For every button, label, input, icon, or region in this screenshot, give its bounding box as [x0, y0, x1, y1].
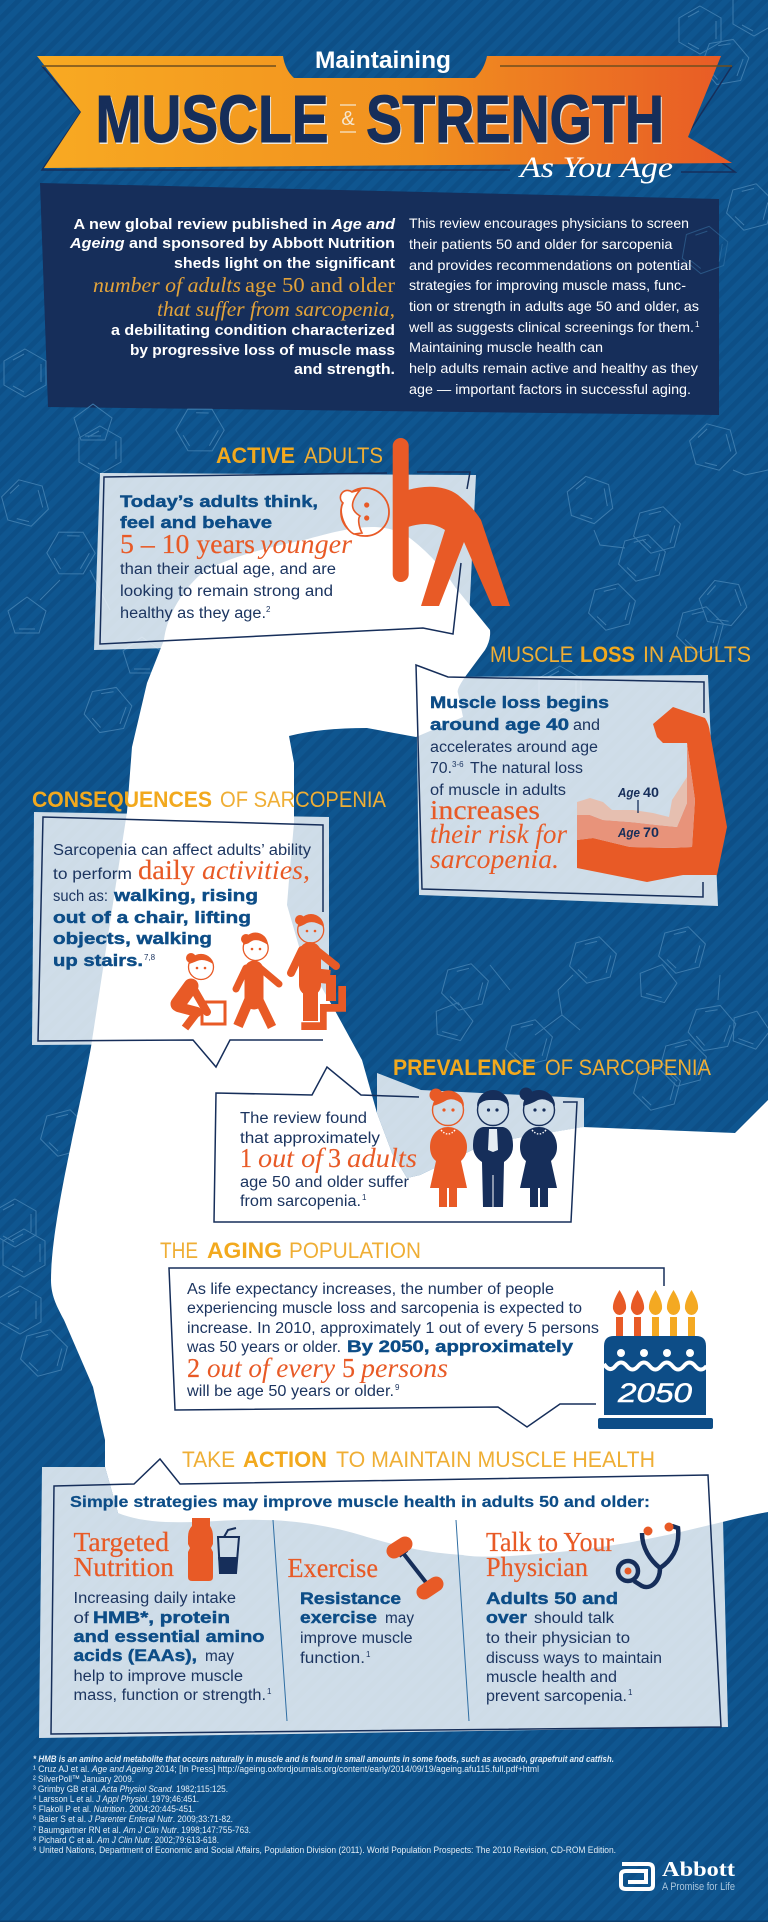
muscle loss text: 70. [430, 760, 452, 777]
icon: nutrition bottle and cup [188, 1518, 239, 1581]
consequences text: walking, rising [113, 886, 258, 905]
intro left text: by progressive loss of muscle mass [130, 343, 395, 359]
consequences text: 7,8 [144, 953, 156, 962]
aging population text: was 50 years or older. [186, 1339, 341, 1356]
active adults text: looking to remain strong and [120, 583, 333, 600]
column: talk to your physician: muscle health and [486, 1669, 617, 1686]
intro right text: and provides recommendations on potential [409, 258, 692, 273]
column: targeted nutrition: acids (EAAs), [74, 1646, 197, 1665]
column: targeted nutrition: Targeted [74, 1527, 169, 1557]
consequences text: such as: [53, 888, 108, 905]
consequences text: objects, walking [53, 929, 212, 948]
heading: muscle loss [490, 642, 751, 667]
intro right text: This review encourages physicians to screen [409, 216, 689, 231]
intro left text: Ageing and sponsored by Abbott Nutrition [69, 236, 395, 252]
icon: stethoscope [618, 1522, 678, 1587]
intro left text: sheds light on the significant [174, 256, 395, 272]
footnotes: ⁹ United Nations, Department of Economic and Social Affairs, Population Division (2011). World Population Prospects: The 2010 Revision, CD-ROM Edition. [33, 1845, 616, 1856]
footnotes: * HMB is an amino acid metabolite that occurs naturally in muscle and is found in small amounts in some foods, such as avocado, grapefruit and catfish. [33, 1754, 614, 1765]
heading: consequences: CONSEQUENCES [32, 787, 212, 812]
person lifting box [178, 953, 225, 1028]
icon: birthday cake 2050: 2050 [617, 1378, 692, 1408]
heading: prevalence: OF SARCOPENIA [545, 1055, 711, 1080]
take action intro line: Simple strategies may improve muscle health in adults 50 and older: [70, 1494, 650, 1511]
column: talk to your physician: 1 [628, 1688, 633, 1697]
aging population text: 5 [342, 1353, 355, 1383]
heading: consequences: OF SARCOPENIA [220, 787, 386, 812]
column: exercise: improve muscle [300, 1630, 412, 1647]
heading: prevalence [393, 1055, 711, 1080]
intro left text: age 50 and older [245, 273, 395, 297]
banner heading: Muscle: MUSCLE [96, 84, 330, 158]
intro right text: tion or strength in adults age 50 and older, as [409, 299, 699, 314]
icon: stretching adult [340, 438, 510, 606]
heading: aging population: POPULATION [289, 1238, 421, 1263]
aging population text: will be age 50 years or older. [186, 1383, 394, 1400]
icon: three adults [430, 1088, 557, 1207]
banner ribbon shadow [42, 66, 735, 172]
icon: people doing daily activities [178, 914, 346, 1030]
muscle loss text: their risk for [430, 819, 567, 849]
column: targeted nutrition: HMB*, protein [93, 1608, 230, 1627]
active adults text: than their actual age, and are [120, 561, 336, 578]
consequences text: activities, [202, 855, 310, 885]
heading: consequences [32, 787, 386, 812]
footnotes: ⁵ Flakoll P et al. Nutrition. 2004;20:445-451. [33, 1804, 195, 1815]
consequences text: up stairs. [53, 951, 143, 970]
column: talk to your physician: Talk to Your [486, 1527, 614, 1557]
column: exercise: exercise [300, 1608, 377, 1627]
prevalence text: out of [258, 1143, 327, 1173]
heading: take action: TAKE [182, 1447, 235, 1472]
prevalence text: adults [347, 1143, 417, 1173]
column: targeted nutrition: Increasing daily intake [74, 1590, 236, 1607]
footnotes: ⁶ Baier S et al. J Parenter Enteral Nutr. 2009;33:71-82. [33, 1814, 233, 1825]
prevalence text [240, 1110, 417, 1210]
heading: muscle loss: MUSCLE [490, 642, 573, 667]
consequences text [53, 842, 311, 970]
column: talk to your physician: Adults 50 and [486, 1589, 618, 1608]
aging population text: increase. In 2010, approximately 1 out of every 5 persons [187, 1320, 599, 1337]
white arm and body silhouette [51, 527, 768, 1557]
aging population text: experiencing muscle loss and sarcopenia is expected to [187, 1300, 582, 1317]
icon: birthday cake 2050 [598, 1290, 713, 1429]
aging population text [186, 1281, 599, 1400]
active adults text: 2 [266, 605, 271, 614]
muscle loss text: sarcopenia. [430, 844, 559, 874]
footnotes: ³ Grimby GB et al. Acta Physiol Scand. 1982;115:125. [33, 1784, 228, 1795]
heading: muscle loss: IN ADULTS [643, 642, 751, 667]
icon: flexed arm with muscle loss layers: Age [617, 785, 640, 800]
column: targeted nutrition: and essential amino [74, 1627, 264, 1646]
muscle loss text: 3-6 [452, 760, 464, 769]
intro panel background [40, 183, 719, 415]
column: exercise: Exercise [288, 1553, 378, 1583]
heading: prevalence: PREVALENCE [393, 1055, 536, 1080]
column: exercise [288, 1544, 436, 1667]
intro left text: a debilitating condition characterized [111, 323, 395, 339]
Abbott logo [621, 1857, 735, 1893]
heading: aging population: AGING [207, 1238, 282, 1263]
consequences text: out of a chair, lifting [53, 908, 251, 927]
column: exercise: Resistance [300, 1589, 401, 1608]
intro right text: Maintaining muscle health can [409, 340, 603, 355]
active adults text [120, 492, 353, 622]
muscle loss text: Muscle loss begins [430, 693, 609, 712]
column: talk to your physician: to their physician to [486, 1630, 630, 1647]
banner heading: Strength: STRENGTH [366, 82, 664, 157]
active adults text: feel and behave [120, 513, 272, 532]
molecule pattern [0, 0, 768, 1382]
panel: consequences [32, 812, 346, 1067]
title banner [37, 47, 735, 184]
icon: flexed arm with muscle loss layers: 70 [643, 824, 659, 840]
active adults text: younger [257, 529, 353, 559]
icon: flexed arm with muscle loss layers: Age [617, 825, 640, 840]
column: targeted nutrition: Nutrition [74, 1552, 175, 1582]
footnotes: ⁷ Baumgartner RN et al. Am J Clin Nutr. 1998;147:755-763. [33, 1825, 251, 1836]
banner heading: Muscle: MUSCLE [96, 82, 328, 157]
active adults text: 5 – 10 years [120, 529, 255, 559]
column: targeted nutrition: help to improve muscle [74, 1668, 243, 1685]
woman in orange [430, 1088, 467, 1207]
intro right text: 1 [695, 320, 700, 329]
heading: aging population: THE [160, 1238, 198, 1263]
intro right text: age — important factors in successful aging. [409, 382, 691, 397]
intro right text: well as suggests clinical screenings for them. [408, 320, 694, 335]
person walking [236, 932, 279, 1027]
column: talk to your physician: prevent sarcopenia. [486, 1688, 627, 1705]
heading: active adults [216, 443, 383, 468]
icon: flexed arm with muscle loss layers: 40 [643, 784, 659, 800]
footnotes [33, 1754, 616, 1856]
heading: active adults: ADULTS [304, 443, 383, 468]
heading: muscle loss: LOSS [580, 642, 635, 667]
heading: active adults: ACTIVE [216, 443, 295, 468]
prevalence text: The review found [240, 1110, 367, 1127]
aging population text: persons [359, 1353, 448, 1383]
intro right text: strategies for improving muscle mass, func- [409, 278, 686, 293]
intro right text: their patients 50 and older for sarcopenia [409, 237, 673, 252]
aging population text: 2 [187, 1353, 200, 1383]
muscle loss text: and [573, 717, 600, 734]
footnotes: ⁴ Larsson L et al. J Appl Physiol. 1979;46:451. [33, 1794, 199, 1805]
column: talk to your physician: Physician [486, 1552, 588, 1582]
muscle loss text: accelerates around age [430, 739, 598, 756]
prevalence text: 1 [240, 1143, 252, 1173]
prevalence text: that approximately [240, 1130, 380, 1147]
column: exercise: may [385, 1610, 414, 1627]
column: targeted nutrition: of [74, 1610, 90, 1627]
banner ribbon [37, 56, 732, 168]
muscle loss text: increases [430, 795, 540, 825]
column: targeted nutrition: 1 [267, 1687, 272, 1696]
muscle loss text: The natural loss [470, 760, 583, 777]
heading: take action: TO MAINTAIN MUSCLE HEALTH [336, 1447, 655, 1472]
icon: dumbbell [394, 1544, 436, 1592]
muscle loss text [430, 693, 609, 874]
column: exercise: 1 [366, 1650, 371, 1659]
muscle loss text: of muscle in adults [430, 782, 566, 799]
column: talk to your physician: over [486, 1608, 527, 1627]
footnotes: ⁸ Pichard C et al. Am J Clin Nutr. 2002;79:613-618. [33, 1835, 219, 1846]
column: talk to your physician: discuss ways to maintain [486, 1650, 662, 1667]
intro right text: help adults remain active and healthy as they [409, 361, 698, 376]
footnotes: ¹ Cruz AJ et al. Age and Ageing 2014; [In Press] http://ageing.oxfordjournals.org/content/early/2014/09/19/ageing.afu115.full.pdf+html [33, 1764, 539, 1775]
prevalence text: 3 [328, 1143, 341, 1173]
aging population text: As life expectancy increases, the number of people [187, 1281, 554, 1298]
active adults text: healthy as they age. [120, 605, 266, 622]
footnotes: ² SilverPoll™ January 2009. [33, 1774, 134, 1785]
Abbott logo: A Promise for Life [662, 1881, 735, 1893]
column: targeted nutrition [74, 1518, 272, 1704]
column: exercise: function. [300, 1650, 365, 1667]
ampersand [340, 105, 356, 132]
heading: aging population [160, 1238, 421, 1263]
panel: take action [39, 1459, 728, 1738]
heading: take action [182, 1447, 655, 1472]
panel: muscle loss [416, 665, 727, 906]
column: targeted nutrition: may [205, 1648, 234, 1665]
man in navy suit [473, 1090, 513, 1207]
prevalence text: from sarcopenia. [240, 1193, 361, 1210]
intro left text [69, 217, 396, 378]
aging population text: By 2050, approximately [347, 1337, 574, 1356]
panel: aging population [169, 1268, 713, 1429]
intro right text [408, 216, 700, 397]
intro left text: and strength. [294, 362, 395, 378]
aging population text: 9 [395, 1383, 400, 1392]
icon: flexed arm with muscle loss layers [577, 707, 727, 882]
active adults text: Today’s adults think, [120, 492, 318, 511]
consequences text: to perform [53, 866, 132, 883]
Abbott logo: Abbott [662, 1857, 735, 1881]
intro left text: that suffer from sarcopenia, [157, 297, 395, 321]
banner heading: Maintaining: Maintaining [315, 47, 451, 74]
banner heading: Strength: STRENGTH [367, 84, 665, 158]
column: talk to your physician [486, 1522, 678, 1705]
panel: active adults [94, 438, 510, 650]
prevalence text: age 50 and older suffer [240, 1174, 409, 1191]
consequences text: daily [138, 855, 196, 885]
intro left text: A new global review published in Age and [74, 217, 396, 233]
prevalence text: 1 [362, 1193, 367, 1202]
muscle loss text: around age 40 [430, 715, 569, 734]
woman in navy dress [520, 1088, 557, 1207]
column: targeted nutrition: mass, function or strength. [74, 1687, 266, 1704]
panel: prevalence [214, 1067, 584, 1222]
heading: take action: ACTION [243, 1447, 327, 1472]
intro left text: number of adults [93, 273, 241, 297]
column: talk to your physician: should talk [534, 1610, 614, 1627]
person climbing stairs [291, 914, 346, 1030]
aging population text: out of every [207, 1353, 335, 1383]
ampersand: & [341, 108, 355, 130]
banner subheading: As You Age [518, 151, 673, 184]
consequences text: Sarcopenia can affect adults’ ability [53, 842, 311, 859]
